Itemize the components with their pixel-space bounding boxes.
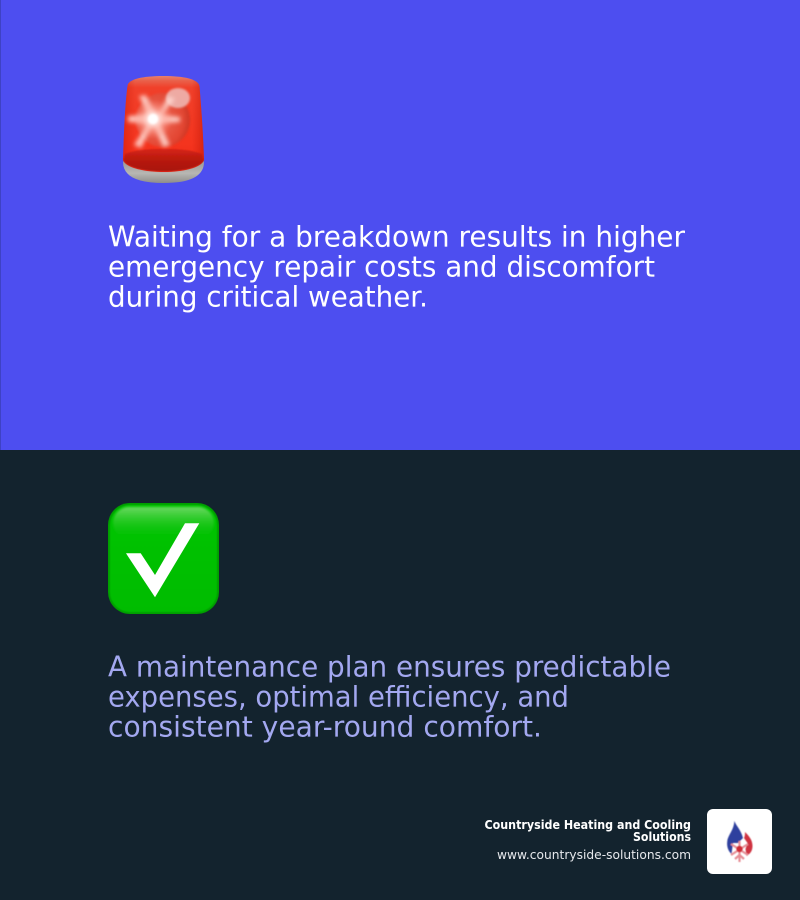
footer: company name	[484, 818, 691, 844]
footer: company name: Countryside Heating and Cooling	[484, 818, 691, 832]
icon: red siren light	[123, 76, 204, 183]
text: maintenance statement	[108, 650, 671, 744]
panel: maintenance plan	[0, 450, 800, 900]
text: breakdown statement: emergency repair costs and discomfort	[108, 250, 655, 284]
text: maintenance statement: A maintenance plan ensures predictable	[108, 650, 671, 684]
icon: green check mark	[108, 503, 219, 614]
text: breakdown statement: Waiting for a breakdown results in higher	[108, 220, 685, 254]
text: maintenance statement: consistent year-round comfort.	[108, 710, 542, 744]
footer: company name: Solutions	[633, 830, 691, 844]
panel: breakdown warning	[0, 0, 800, 450]
text: breakdown statement	[108, 220, 685, 314]
footer: website: www.countryside-solutions.com	[497, 847, 691, 862]
logo: flame and snowflake	[707, 809, 772, 874]
text: breakdown statement: during critical weather.	[108, 280, 428, 314]
text: maintenance statement: expenses, optimal efficiency, and	[108, 680, 569, 714]
